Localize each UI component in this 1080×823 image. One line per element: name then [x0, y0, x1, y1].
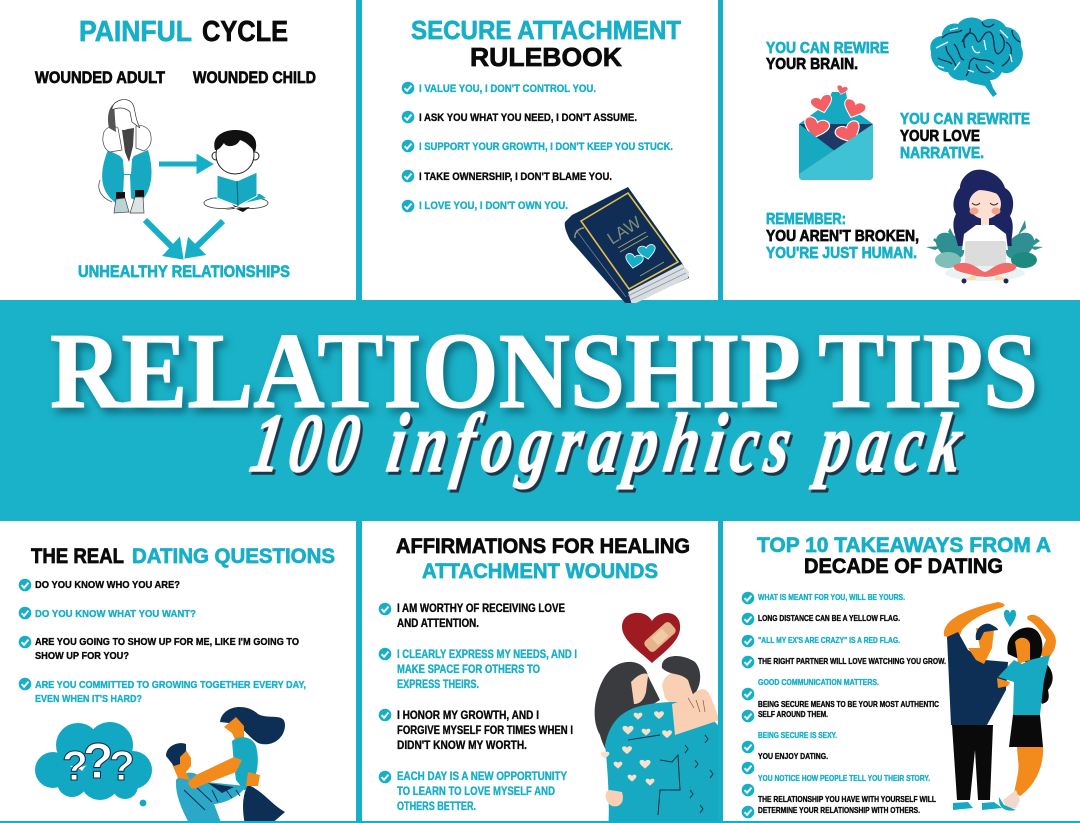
icon: hugging couple [166, 707, 285, 823]
checklist: takeaways: THE RIGHT PARTNER WILL LOVE WATCHING YOU GROW. [758, 656, 946, 666]
label: wounded adult: WOUNDED ADULT [35, 68, 166, 87]
icon: law book [565, 187, 689, 305]
icon: wounded child figure [204, 130, 268, 212]
checklist: takeaways: YOU NOTICE HOW PEOPLE TELL YOU THEIR STORY. [758, 773, 930, 783]
checklist: rules: I SUPPORT YOUR GROWTH, I DON'T KEEP YOU STUCK. [419, 141, 673, 153]
heading: decade of dating: DECADE OF DATING [804, 555, 1003, 578]
label: unhealthy relationships: UNHEALTHY RELATIONSHIPS [78, 262, 290, 281]
list: affirmations: I CLEARLY EXPRESS MY NEEDS, AND I [397, 649, 577, 661]
panel: top 10 takeaways [742, 534, 1056, 818]
checklist: questions [19, 579, 306, 705]
label: wounded child: WOUNDED CHILD [193, 68, 316, 87]
arrow: child to relationships [188, 221, 223, 255]
list: affirmations: TO LEARN TO LOVE MYSELF AND [397, 786, 555, 798]
text: remember: YOU AREN'T BROKEN, [766, 228, 919, 245]
heading: secure attachment: SECURE ATTACHMENT [411, 15, 681, 45]
list: affirmations: FORGIVE MYSELF FOR TIMES WHEN I [397, 725, 573, 737]
text: you can rewrite your love narrative: YOU CAN REWRITE [900, 111, 1030, 128]
icon: envelope with hearts [799, 85, 873, 180]
banner [0, 300, 1080, 521]
checklist: rules: I VALUE YOU, I DON'T CONTROL YOU. [419, 83, 596, 95]
icon: law book: LAW [604, 213, 645, 248]
checklist: questions: DO YOU KNOW WHO YOU ARE? [35, 579, 180, 591]
list: affirmations: AND ATTENTION. [397, 618, 479, 630]
arrow: adult to relationships [145, 220, 180, 256]
heading: rulebook: RULEBOOK [470, 42, 622, 72]
heading: the real dating questions: THE REAL [31, 545, 124, 568]
checklist: takeaways: GOOD COMMUNICATION MATTERS. [758, 677, 879, 687]
icon: couple with heart [944, 602, 1056, 811]
panel: rewire your brain [766, 18, 1043, 284]
checklist: questions: ARE YOU GOING TO SHOW UP FOR ME, LIKE I'M GOING TO [35, 636, 299, 648]
heading: top 10 takeaways from a: TOP 10 TAKEAWAYS FROM A [757, 534, 1051, 557]
list: affirmations: I AM WORTHY OF RECEIVING LOVE [397, 603, 565, 615]
icon: embracing couple [595, 656, 722, 823]
list: affirmations [379, 603, 577, 813]
checklist: questions: ARE YOU COMMITTED TO GROWING TOGETHER EVERY DAY, [35, 679, 306, 691]
arrow: adult to child [159, 158, 209, 170]
icon: bandaged heart [622, 613, 680, 663]
list: affirmations: OTHERS BETTER. [397, 801, 476, 813]
subtitle: 100 infographics pack: 100 infographics pack [245, 396, 969, 489]
panel: painful cycle [35, 16, 316, 281]
list: affirmations: EXPRESS THEIRS. [397, 679, 479, 691]
checklist: takeaways: SELF AROUND THEM. [758, 709, 828, 719]
checklist: takeaways: WHAT IS MEANT FOR YOU, WILL BE YOURS. [758, 592, 905, 602]
icon: thought bubble with question marks: ? [109, 742, 135, 789]
text: remember: YOU'RE JUST HUMAN. [766, 245, 917, 262]
heading: attachment wounds: ATTACHMENT WOUNDS [422, 560, 658, 583]
heading: affirmations for healing: AFFIRMATIONS FOR HEALING [396, 535, 690, 558]
text: remember: REMEMBER: [766, 211, 846, 228]
text: you can rewire your brain [766, 40, 889, 73]
checklist: takeaways: LONG DISTANCE CAN BE A YELLOW FLAG. [758, 613, 900, 623]
checklist: takeaways [742, 592, 946, 818]
panel: affirmations [379, 535, 722, 823]
checklist: takeaways: THE RELATIONSHIP YOU HAVE WITH YOURSELF WILL [758, 794, 936, 804]
checklist: rules: I LOVE YOU, I DON'T OWN YOU. [419, 200, 568, 212]
icon: woman with laptop [926, 170, 1043, 284]
checklist: rules: I TAKE OWNERSHIP, I DON'T BLAME YOU. [419, 171, 612, 183]
text: you can rewire your brain: YOUR BRAIN. [766, 56, 858, 73]
checklist: questions: SHOW UP FOR YOU? [35, 650, 129, 662]
checklist: questions: DO YOU KNOW WHAT YOU WANT? [35, 608, 196, 620]
panel: the real dating questions [19, 545, 335, 823]
heading: painful cycle: CYCLE [202, 16, 288, 48]
list: affirmations: I HONOR MY GROWTH, AND I [397, 710, 539, 722]
list: affirmations: EACH DAY IS A NEW OPPORTUNITY [397, 771, 567, 783]
icon: thought bubble with question marks: ? [83, 733, 113, 789]
heading: the real dating questions: DATING QUESTIONS [132, 545, 335, 568]
text: you can rewrite your love narrative [900, 111, 1030, 162]
text: you can rewrite your love narrative: NARRATIVE. [900, 145, 984, 162]
icon: thought bubble with question marks: ? [62, 742, 88, 789]
heading: the real dating questions [31, 545, 335, 568]
text: you can rewrite your love narrative: YOUR LOVE [900, 128, 980, 145]
heading: painful cycle: PAINFUL [79, 16, 192, 48]
checklist: takeaways: DETERMINE YOUR RELATIONSHIP WITH OTHERS. [758, 805, 920, 815]
icon: brain [930, 18, 1023, 97]
checklist: rules: I ASK YOU WHAT YOU NEED, I DON'T ASSUME. [419, 112, 637, 124]
icon: wounded adult figure [99, 100, 152, 213]
checklist: questions: EVEN WHEN IT'S HARD? [35, 693, 142, 705]
list: affirmations: DIDN'T KNOW MY WORTH. [397, 740, 527, 752]
checklist: takeaways: "ALL MY EX'S ARE CRAZY" IS A RED FLAG. [758, 635, 900, 645]
panel: secure attachment rulebook [402, 15, 681, 212]
checklist: takeaways: BEING SECURE MEANS TO BE YOUR MOST AUTHENTIC [758, 699, 939, 709]
icon: thought bubble with question marks [35, 722, 152, 806]
text: remember [766, 211, 919, 262]
heading: painful cycle [79, 16, 288, 48]
checklist: takeaways: YOU ENJOY DATING. [758, 751, 828, 761]
list: affirmations: MAKE SPACE FOR OTHERS TO [397, 664, 540, 676]
checklist: takeaways: BEING SECURE IS SEXY. [758, 730, 837, 740]
checklist: rules [402, 82, 673, 212]
text: you can rewire your brain: YOU CAN REWIRE [766, 40, 889, 57]
